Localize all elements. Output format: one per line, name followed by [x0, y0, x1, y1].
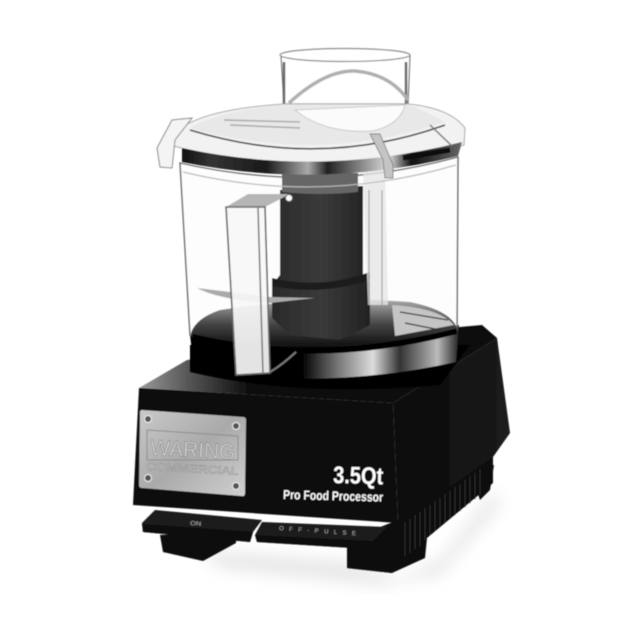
dark recess under bowl: [190, 345, 470, 389]
left foot: [160, 530, 236, 561]
top surface: [139, 325, 497, 403]
ON label: ON: [190, 521, 201, 528]
left latch: [157, 118, 192, 168]
front right foot: [347, 545, 398, 573]
vented lower housing: [347, 455, 493, 573]
vent slots: [405, 469, 480, 556]
lid chrome band: [182, 142, 462, 175]
screws: [144, 416, 152, 422]
bowl rim inner highlight: [183, 165, 456, 187]
light sleeve beside shaft: [363, 168, 388, 305]
bowl floor disc: [191, 300, 457, 349]
COMMERCIAL wordmark: COMMERCIAL: [146, 461, 238, 478]
base unit: [133, 325, 510, 573]
logo frame: [147, 430, 238, 460]
bowl collar ring: [190, 325, 459, 379]
chute arch: [289, 71, 408, 103]
front face: [133, 388, 398, 523]
WARING wordmark: WARING: [150, 435, 236, 464]
bowl assembly: [157, 48, 470, 389]
right latch: [370, 134, 393, 178]
lid: [157, 104, 465, 178]
inner shaft: [272, 186, 370, 340]
model label: Pro Food Processor: [283, 487, 383, 505]
blade: [197, 288, 315, 303]
brand nameplate: [139, 410, 246, 496]
drop shadow under appliance: [200, 490, 500, 585]
side face: [393, 338, 510, 523]
rear foot: [470, 465, 494, 500]
OFF-PULSE button: [255, 522, 387, 549]
OFF-PULSE label: OFF-PULSE: [279, 526, 356, 537]
ON button: [142, 510, 262, 542]
clear bowl body: [180, 157, 458, 349]
feed chute: [280, 48, 410, 104]
bowl handle: [226, 194, 296, 375]
capacity label: 3.5Qt: [333, 462, 384, 490]
